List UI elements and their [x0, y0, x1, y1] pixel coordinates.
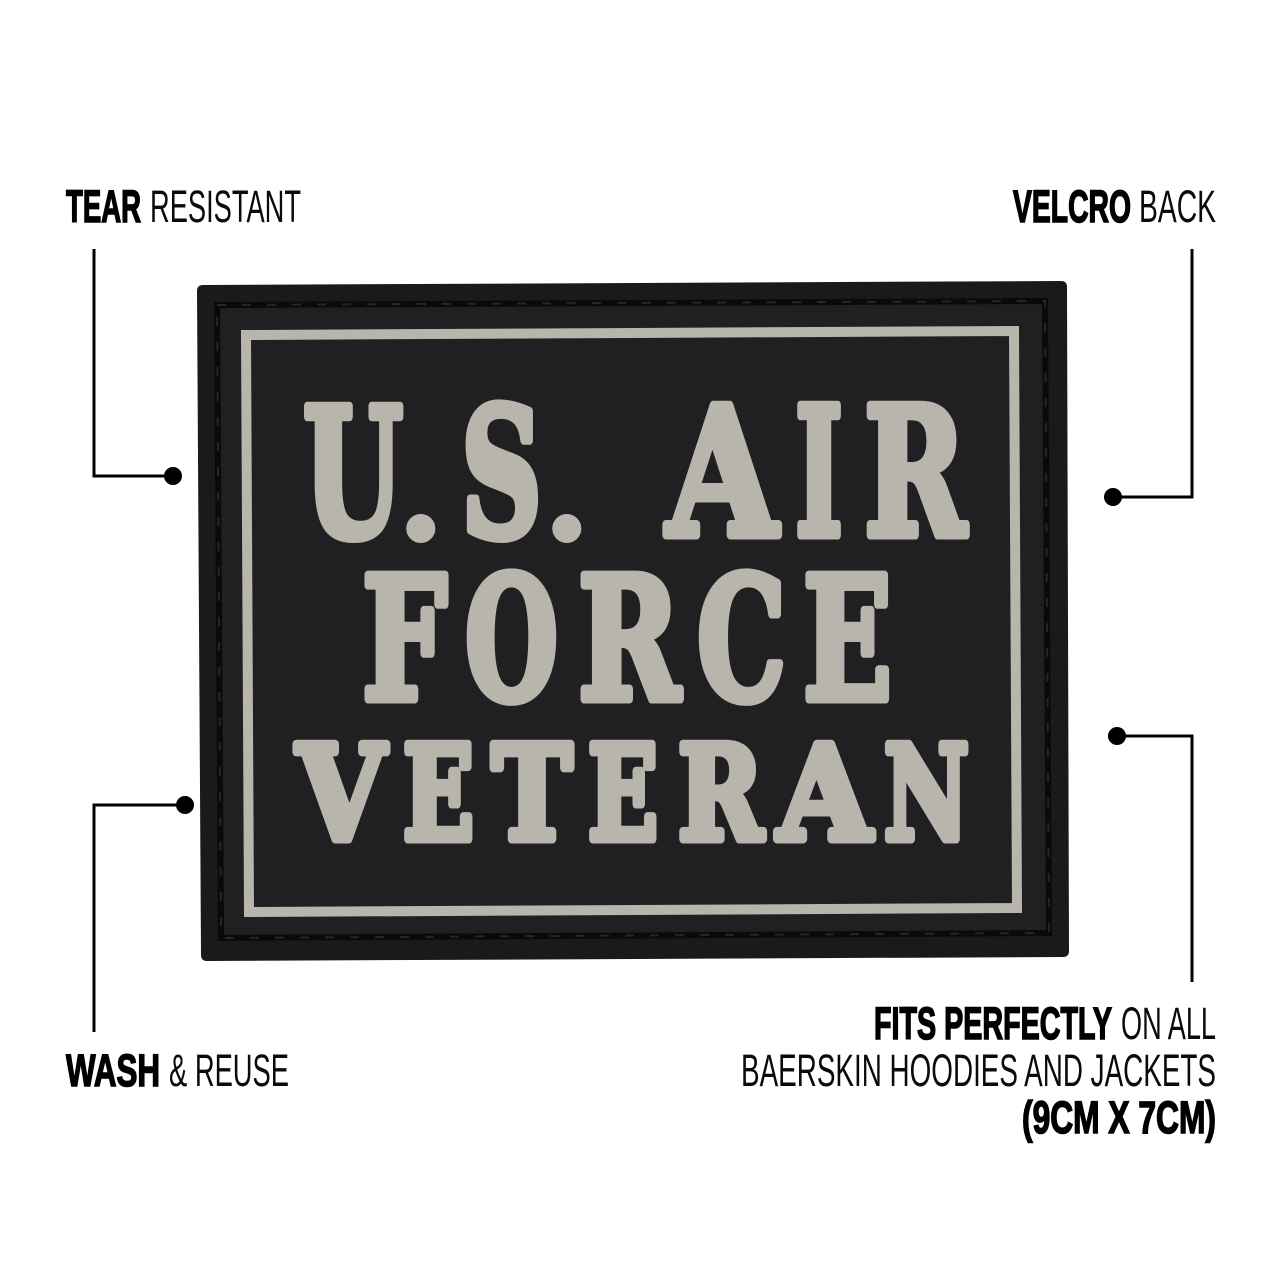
patch border frame — [246, 331, 1017, 912]
patch text: U.S. AIR: S — [461, 369, 542, 578]
dot — [176, 796, 194, 814]
patch — [197, 281, 1069, 961]
patch inner area — [217, 301, 1049, 938]
label line 1: ON ALL — [1121, 998, 1216, 1049]
label — [66, 1045, 289, 1096]
callout: tear resistant — [66, 181, 301, 485]
patch base — [197, 281, 1069, 961]
connector — [94, 805, 185, 1032]
callout: fits perfectly — [741, 727, 1216, 1143]
connector — [1113, 249, 1192, 497]
patch text: VETERAN: V — [296, 717, 387, 870]
patch text: VETERAN: A — [776, 717, 873, 870]
patch text: U.S. AIR: I — [795, 368, 843, 577]
patch text: VETERAN: N — [884, 717, 969, 870]
patch text: FORCE: O — [465, 540, 558, 740]
label line 1: FITS PERFECTLY — [874, 998, 1112, 1049]
patch text: U.S. AIR: A — [665, 368, 779, 577]
stitch detail — [217, 301, 1049, 938]
dot — [164, 467, 182, 485]
callout: velcro back — [1013, 181, 1216, 506]
dot — [1104, 488, 1122, 506]
patch text: VETERAN: E — [403, 717, 474, 870]
stitching — [217, 301, 1049, 938]
patch text: U.S. AIR: . — [548, 437, 586, 563]
label: VELCRO — [1013, 181, 1131, 232]
patch text: VETERAN: R — [678, 717, 764, 870]
connector — [94, 249, 173, 476]
patch text: VETERAN: T — [492, 717, 572, 870]
label — [66, 181, 301, 232]
patch text: FORCE: R — [578, 540, 681, 740]
patch text: U.S. AIR: U — [303, 369, 403, 578]
patch text: FORCE: F — [362, 540, 447, 740]
label: & REUSE — [169, 1045, 289, 1096]
label: RESISTANT — [150, 181, 301, 232]
connector — [1117, 736, 1192, 982]
dot — [1108, 727, 1126, 745]
callout: wash and reuse — [66, 796, 289, 1096]
label: WASH — [66, 1045, 160, 1096]
label: TEAR — [66, 181, 141, 232]
patch text: FORCE: E — [803, 540, 892, 740]
patch text: U.S. AIR: . — [402, 437, 440, 563]
patch text: U.S. AIR: R — [864, 368, 967, 577]
label: BACK — [1139, 181, 1216, 232]
patch text: FORCE: C — [697, 540, 786, 740]
patch text: VETERAN: E — [588, 717, 658, 870]
